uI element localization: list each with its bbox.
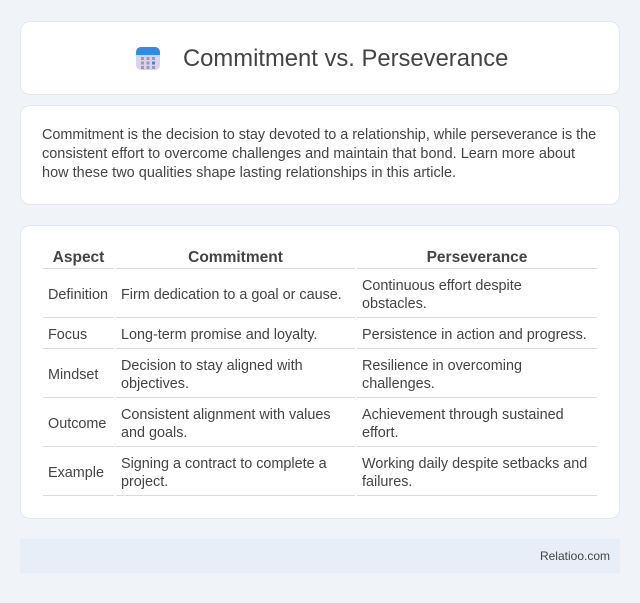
footer bar [20,539,620,573]
row: definition [48,278,522,312]
row: outcome: and goals. [121,425,187,441]
text block: introduction: Commitment is the decision to stay devoted to a relationship, while perseverance is the [42,127,596,143]
footer text: Relatioo.com [540,549,610,563]
table header: Commitment [188,249,283,266]
row: example: failures. [362,474,412,490]
row: example [48,456,587,490]
row: focus [48,327,587,343]
row: example: Working daily despite setbacks and [362,456,587,472]
row: mindset: Decision to stay aligned with [121,358,303,374]
text block: introduction [42,127,596,181]
row: mindset [48,358,522,392]
row: outcome: Achievement through sustained [362,407,564,423]
row: definition: Continuous effort despite [362,278,522,294]
table header: Perseverance [427,249,527,266]
row: outcome [48,407,564,441]
panel: title card [20,21,620,95]
row: outcome: Outcome [48,416,106,432]
row: mindset: challenges. [362,376,435,392]
row: example: Example [48,465,104,481]
row: focus: Focus [48,327,87,343]
row: mindset: objectives. [121,376,189,392]
row: definition: Definition [48,287,108,303]
panel: comparison table [20,225,620,519]
row: example: Signing a contract to complete a [121,456,327,472]
row: outcome: Consistent alignment with values [121,407,331,423]
title: Commitment vs. Perseverance [183,45,508,72]
comparison table [43,249,597,496]
panel: introduction [20,105,620,205]
text block: introduction: how these two qualities shape lasting relationships in this article. [42,165,456,181]
table header [53,249,527,266]
row: example: project. [121,474,168,490]
row: focus: Persistence in action and progress. [362,327,587,343]
table header: Aspect [53,249,104,266]
row: mindset: Mindset [48,367,98,383]
row: definition: Firm dedication to a goal or cause. [121,287,342,303]
icon: calendar [136,47,160,70]
row: definition: obstacles. [362,296,427,312]
row: outcome: effort. [362,425,399,441]
text block: introduction: consistent effort to overcome challenges and maintain that bond. Learn more about [42,146,575,162]
row: mindset: Resilience in overcoming [362,358,522,374]
row: focus: Long-term promise and loyalty. [121,327,318,343]
